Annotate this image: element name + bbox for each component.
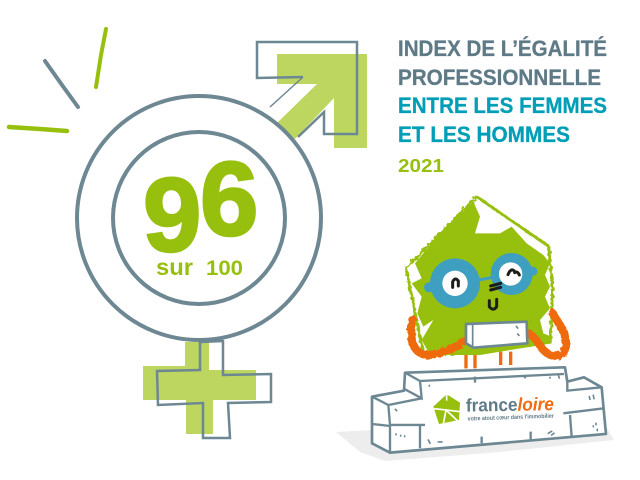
glasses [424,253,537,308]
ground shadow [336,428,614,461]
venus inner circle [113,132,285,304]
arms [411,313,566,356]
pedestal stone outline [372,367,606,453]
legs [466,352,511,368]
title: 2021 [398,156,444,176]
title: ET LES HOMMES [398,122,570,147]
pedestal [372,367,606,453]
stone speckles [395,375,597,443]
eyes, nose and mouth [453,270,519,309]
logo wordmark: franceloire [466,393,554,416]
mascot [406,197,566,368]
score 96: 6 [200,141,258,258]
house rough outline [406,197,553,357]
score label [156,254,243,280]
score 96: 9 [143,157,201,274]
title: PROFESSIONNELLE [398,65,601,90]
score 96 [143,141,258,274]
logo tagline: votre atout cœur dans l'immobilier [468,414,555,423]
score label: sur [156,254,193,280]
female cross symbol [143,341,271,438]
title: ENTRE LES FEMMES [398,93,607,118]
logo icon [433,394,460,424]
venus outer circle [77,96,321,340]
sun rays [9,29,106,131]
title [398,36,607,176]
title: INDEX DE L’ÉGALITÉ [398,36,607,61]
sign held by mascot [466,322,527,348]
house body fill [412,202,552,355]
male arrow symbol [257,42,367,148]
score label: 100 [206,257,243,280]
